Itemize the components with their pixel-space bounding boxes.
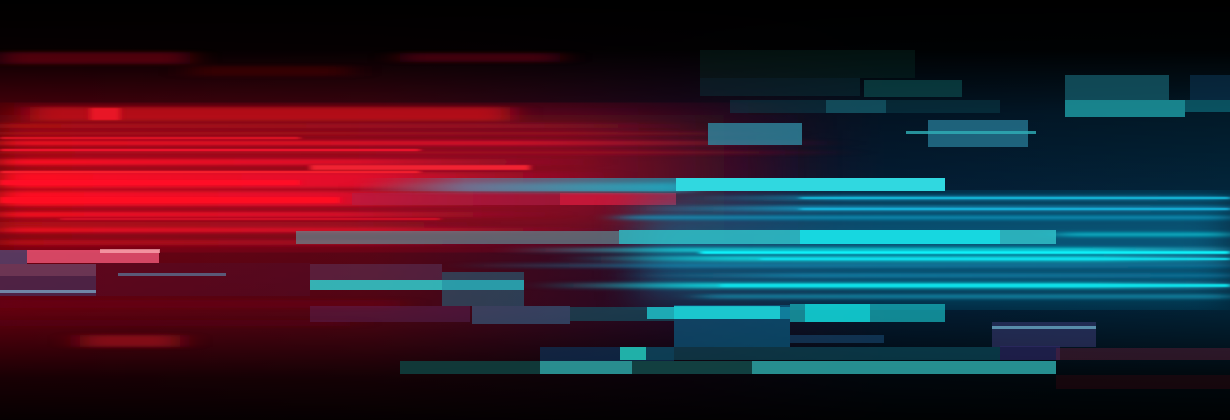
upper right teal glitch panels	[700, 50, 1230, 147]
left lower pale pink and blue bars	[0, 249, 310, 296]
red streaks on the left	[0, 52, 860, 347]
blue-cyan streaks on the right	[360, 183, 1230, 300]
sharp glitch rectangles	[296, 178, 1230, 389]
